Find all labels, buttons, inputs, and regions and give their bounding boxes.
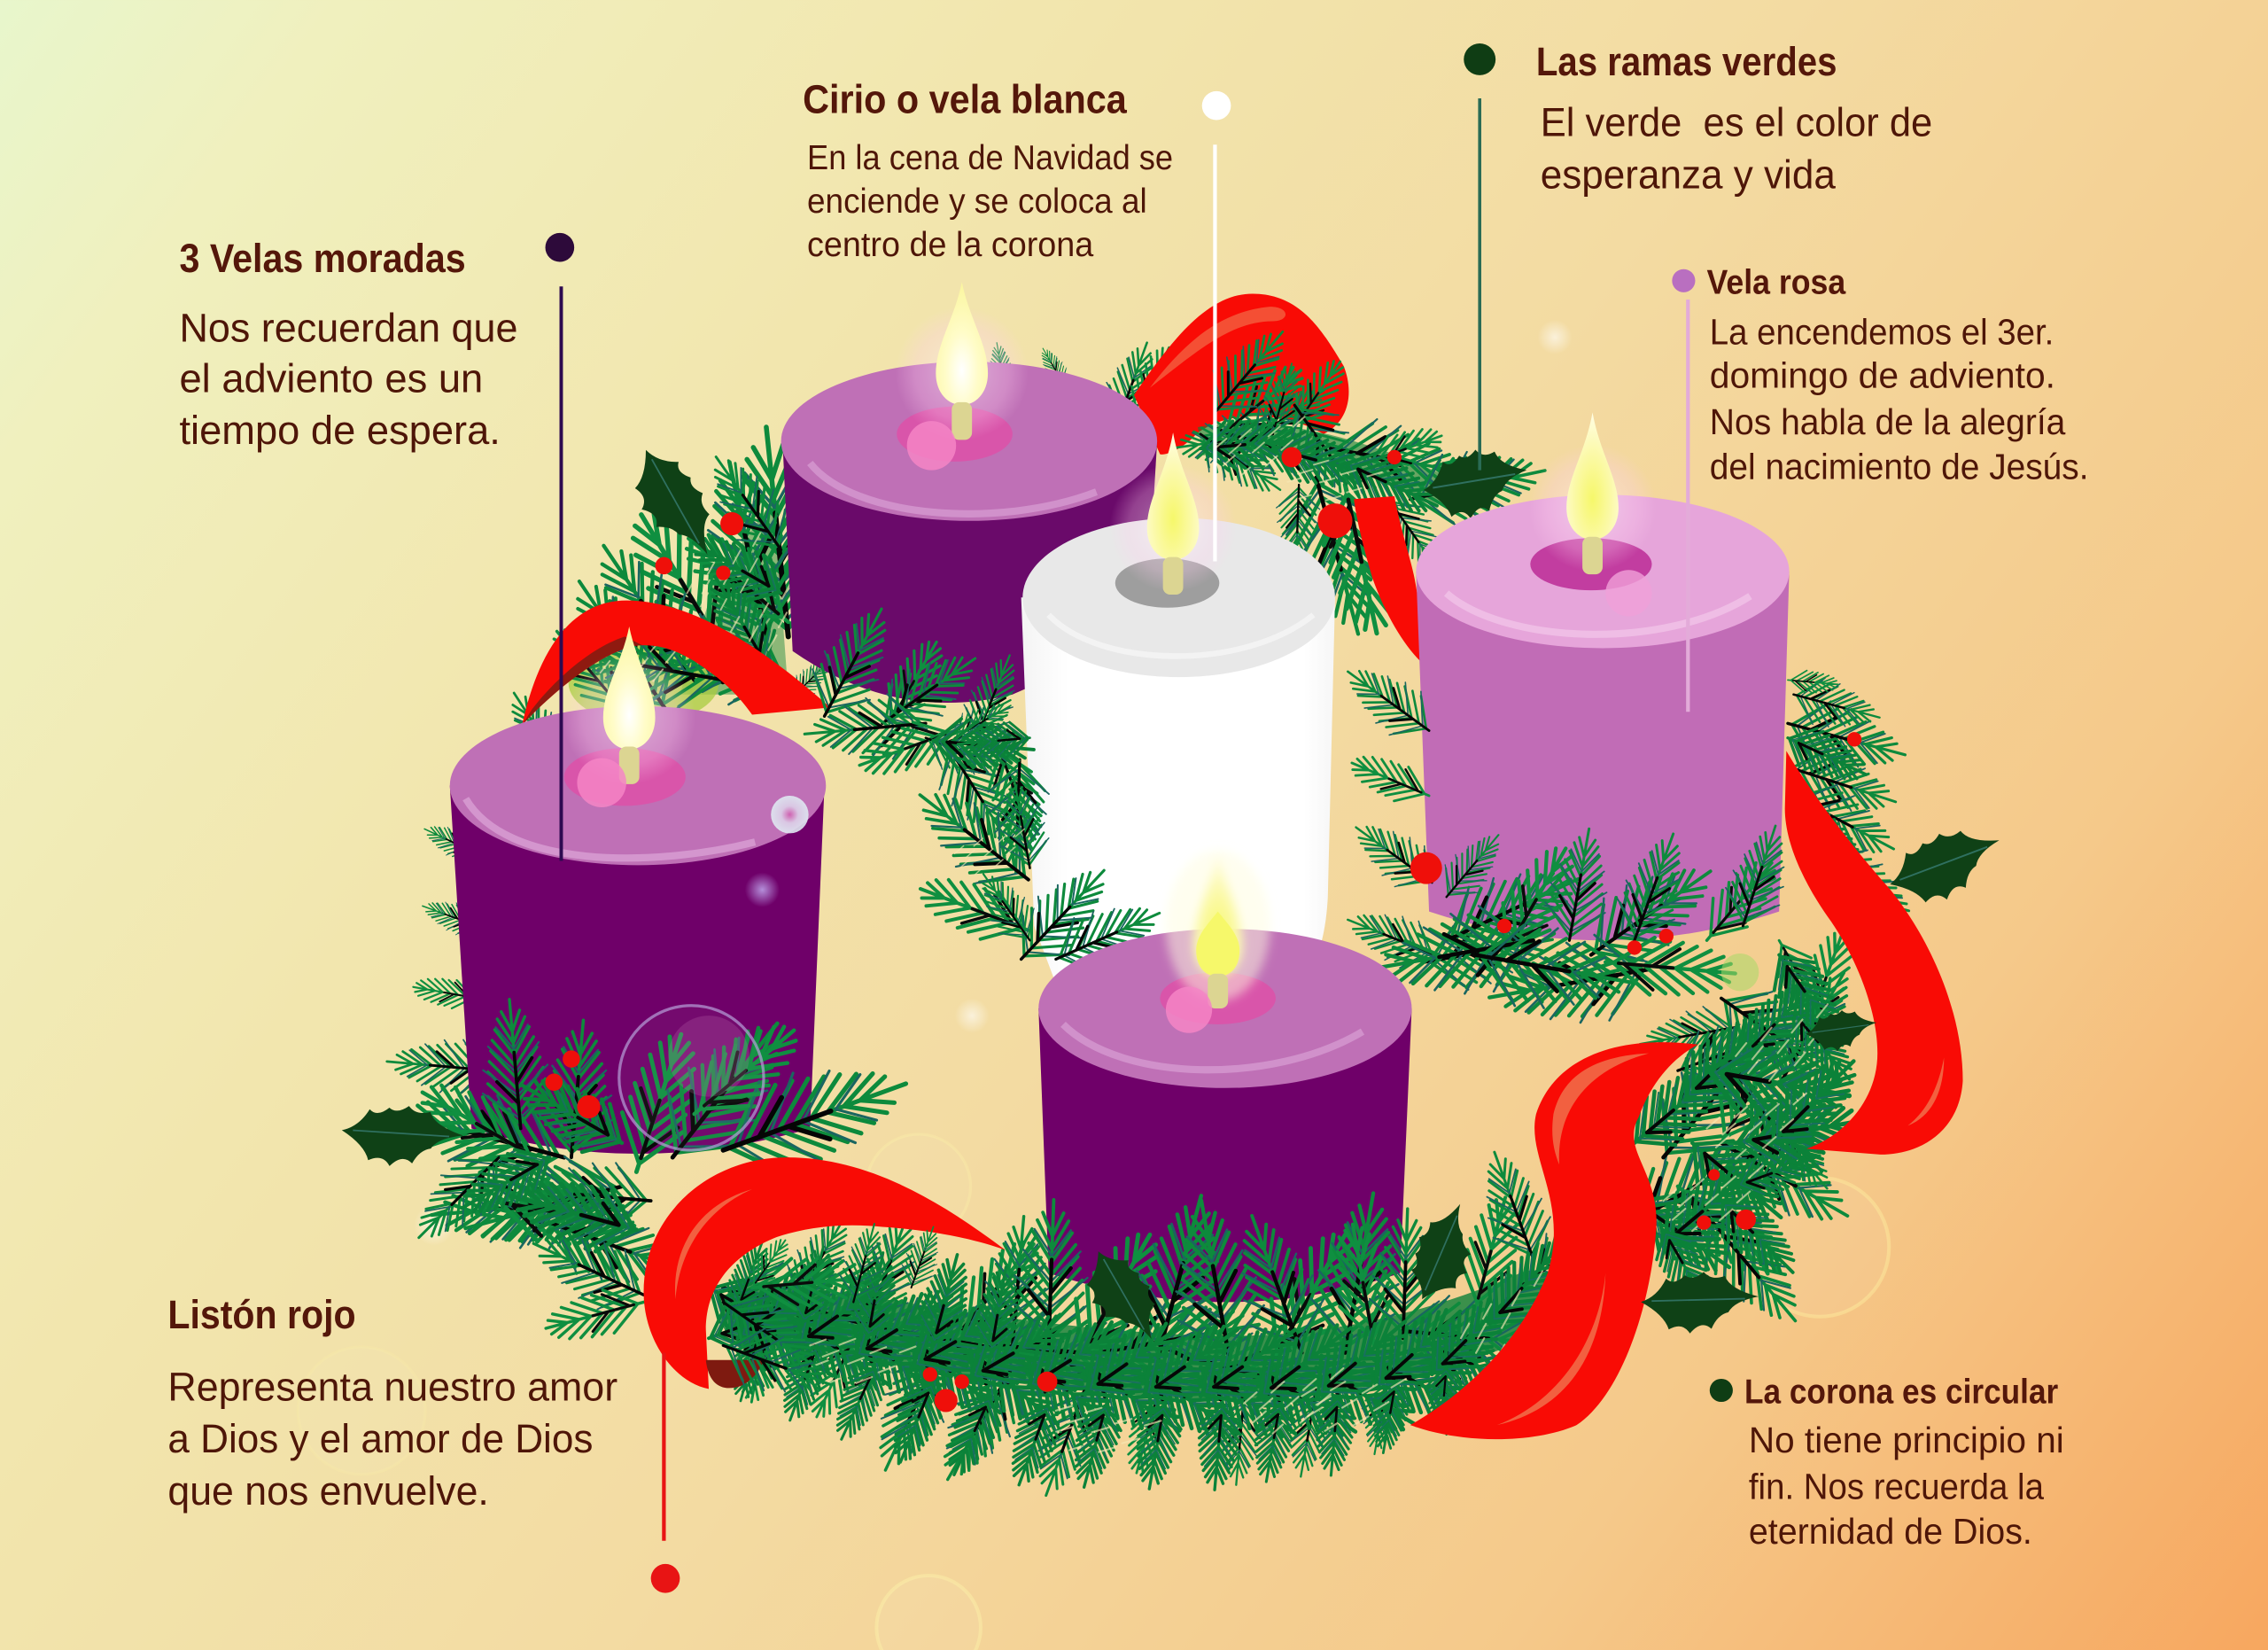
- label: listón rojo: que nos envuelve.: [167, 1468, 489, 1514]
- candle: pink: [1416, 494, 1790, 940]
- label: la corona es circular: No tiene principio ni: [1749, 1420, 2064, 1460]
- wreath: top branches over the ribbon: [1169, 314, 1553, 645]
- label: cirio o vela blanca: Cirio o vela blanca: [803, 76, 1127, 121]
- holly leaf behind right branch: [1421, 447, 1530, 522]
- label: las ramas verdes: esperanza y vida: [1541, 152, 1836, 197]
- label: la corona es circular: eternidad de Dios.: [1749, 1511, 2032, 1552]
- wreath: middle branches: [796, 594, 1802, 1040]
- candle: back left purple: [781, 362, 1157, 703]
- ribbon: back arc: [1134, 293, 1348, 455]
- label: 3 velas moradas: el adviento es un: [179, 355, 483, 401]
- label: la corona es circular: La corona es circular: [1744, 1374, 2058, 1412]
- label: 3 velas moradas: 3 Velas moradas: [179, 236, 466, 281]
- ribbon: back tail: [1354, 496, 1421, 661]
- label: la corona es circular: [1710, 1374, 2064, 1552]
- candle: left purple: [450, 706, 826, 1154]
- label: la corona es circular: fin. Nos recuerda la: [1749, 1466, 2044, 1506]
- label: las ramas verdes: El verde es el color de: [1541, 99, 1932, 144]
- label: vela rosa: domingo de adviento.: [1710, 355, 2055, 396]
- berries: [546, 448, 1861, 1412]
- label: cirio o vela blanca: enciende y se coloca al: [807, 183, 1147, 221]
- ribbon: right: [1785, 751, 1963, 1155]
- wreath: back branches behind candles: [384, 334, 1930, 1099]
- ribbon: S curve: [1410, 1042, 1698, 1439]
- ribbon: upper left: [522, 601, 830, 725]
- label: listón rojo: a Dios y el amor de Dios: [167, 1416, 593, 1461]
- lens bokeh on candles: [577, 421, 1759, 1150]
- label: vela rosa: del nacimiento de Jesús.: [1710, 446, 2089, 486]
- label: 3 velas moradas: tiempo de espera.: [179, 408, 501, 453]
- holly leaves: [338, 436, 2011, 1355]
- label: 3 velas moradas: [179, 233, 574, 860]
- candle: white: [1021, 518, 1335, 984]
- label: cirio o vela blanca: [803, 76, 1231, 561]
- flames: [563, 282, 1656, 1008]
- label: vela rosa: La encendemos el 3er.: [1710, 312, 2054, 353]
- label: 3 velas moradas: Nos recuerdan que: [179, 305, 517, 350]
- sprigs over the ribbons: [706, 1218, 950, 1413]
- label: las ramas verdes: [1464, 39, 1932, 471]
- label: las ramas verdes: Las ramas verdes: [1536, 39, 1837, 84]
- label: vela rosa: Nos habla de la alegría: [1710, 401, 2066, 442]
- label: vela rosa: Vela rosa: [1707, 263, 1846, 301]
- label: vela rosa: [1672, 263, 2089, 712]
- background bokeh lights: [298, 320, 1889, 1650]
- label: listón rojo: Listón rojo: [167, 1292, 356, 1337]
- candle: front purple: [1038, 929, 1411, 1302]
- label: cirio o vela blanca: En la cena de Navidad se: [807, 139, 1173, 177]
- ribbon: lower left: [644, 1157, 1006, 1389]
- label: listón rojo: Representa nuestro amor: [167, 1364, 617, 1409]
- label: listón rojo: [167, 1292, 680, 1593]
- label: cirio o vela blanca: centro de la corona: [807, 226, 1093, 264]
- wreath: front branches: [388, 924, 1874, 1506]
